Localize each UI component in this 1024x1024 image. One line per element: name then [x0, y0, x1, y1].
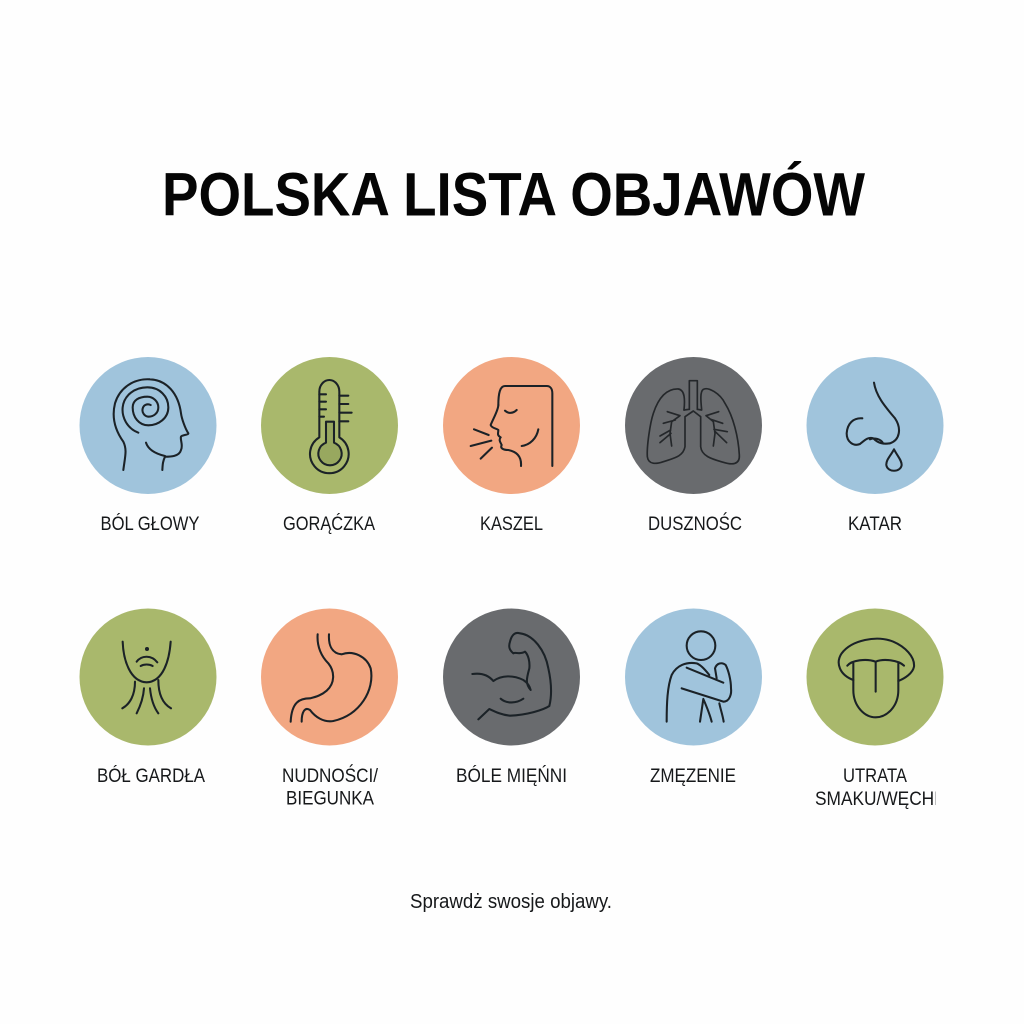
label: nudności / biegunka: NUDNOŚCI/ — [282, 765, 379, 787]
label: kaszel: KASZEL — [480, 514, 543, 535]
symptom: katar — [806, 357, 944, 535]
symptom: kaszel — [443, 357, 580, 535]
icon: head with spiral — [114, 379, 188, 470]
label: ból głowy: BÓL GŁOWY — [100, 513, 200, 535]
icon: nose with drop — [847, 383, 902, 471]
symptom: ból głowy — [80, 357, 216, 535]
label: zmęczenie: ZMĘZENIE — [650, 766, 736, 787]
title: POLSKA LISTA OBJAWÓW — [162, 160, 865, 228]
circle: zmęczenie — [625, 608, 762, 746]
label: nudności / biegunka: BIEGUNKA — [286, 788, 374, 810]
symptom: nudności / biegunka — [261, 608, 398, 810]
circle: bóle mięśni — [443, 608, 580, 746]
icon: lungs — [647, 381, 739, 464]
icon: tongue — [839, 639, 914, 717]
label: duszność: DUSZNOŚC — [648, 513, 742, 535]
symptom: ból gardła — [80, 608, 216, 787]
circle: utrata smaku — [806, 608, 944, 746]
label: bóle mięśni: BÓLE MIĘŃNI — [456, 765, 567, 787]
symptom: zmęczenie — [625, 608, 762, 787]
label: utrata smaku / węchu — [816, 768, 936, 809]
icon: tired person — [667, 631, 731, 722]
circle: ból głowy — [80, 357, 216, 494]
icon: thermometer — [310, 380, 352, 473]
icon: throat — [122, 642, 171, 713]
circle: katar — [806, 357, 944, 494]
label: utrata smaku / węchu: SMAKU/WĘCHI — [815, 789, 939, 810]
footer note: Sprawdż swosje objawy. — [410, 891, 612, 913]
circle: ból gardła — [80, 608, 216, 746]
icon: stomach — [291, 634, 371, 722]
label: ból gardła: BÓŁ GARDŁA — [97, 765, 205, 787]
label: gorączka: GORĄĆZKA — [283, 513, 375, 535]
symptom: bóle mięśni — [443, 608, 580, 787]
symptom: gorączka — [261, 357, 398, 535]
icon: coughing face — [471, 386, 552, 466]
circle: gorączka — [261, 357, 398, 494]
circle: duszność — [625, 357, 762, 494]
symptom: utrata smaku / węchu — [806, 608, 944, 810]
label: utrata smaku / węchu: UTRATA — [843, 766, 907, 787]
icon: flexed arm — [472, 633, 551, 719]
symptom: duszność — [625, 357, 762, 535]
circle: nudności — [261, 608, 398, 746]
circle: kaszel — [443, 357, 580, 494]
label: katar: KATAR — [848, 514, 902, 535]
